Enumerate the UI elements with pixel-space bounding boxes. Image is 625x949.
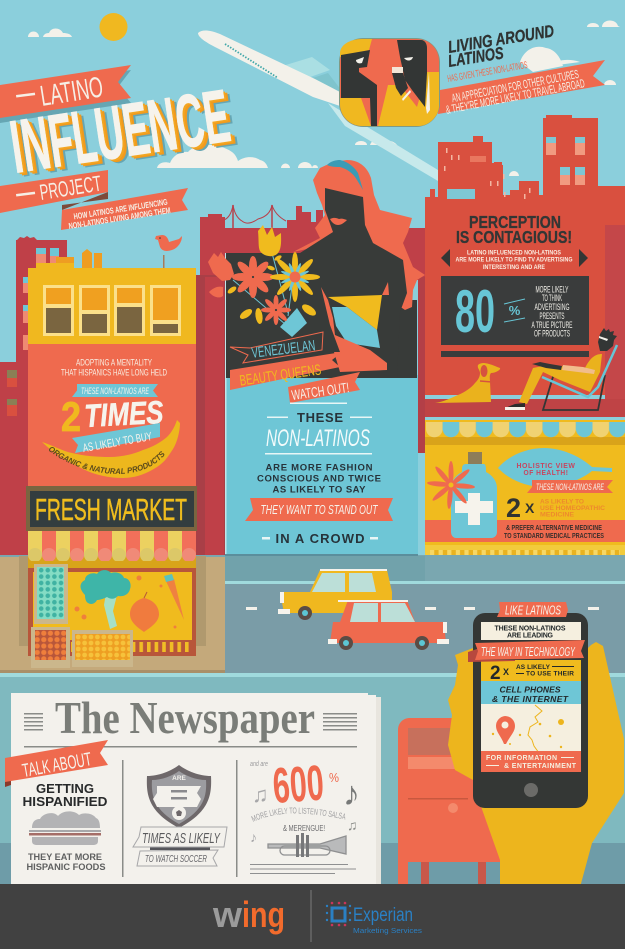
icon: carrot: [164, 574, 184, 620]
woman: [293, 160, 425, 378]
music notes: ♪: [343, 775, 360, 813]
stat: 80 percent: %: [509, 303, 521, 318]
logo: wing: [212, 894, 285, 935]
title: Influence: INFLUENCE: [12, 77, 242, 193]
store body: [28, 344, 196, 490]
screen: leading: ARE LEADING: [507, 632, 554, 640]
logo: experian: Experian: [353, 905, 413, 926]
screen: 2x cell phones: AS LIKELY: [516, 664, 551, 671]
screen: internet: & THE INTERNET: [492, 694, 569, 704]
text: more likely to find: INTERESTING AND ARE: [483, 264, 545, 271]
icon: burger: [29, 811, 101, 845]
text: more likely to find: [456, 250, 573, 271]
ribbon: times as likely: [133, 827, 227, 847]
text: more likely to listen: MORE LIKELY TO LISTEN TO SALSA: [251, 807, 346, 822]
yellow car: [278, 569, 392, 620]
TV screen: [441, 276, 589, 345]
ribbon: as likely to buy: [72, 423, 160, 455]
text on banana: organic products: ORGANIC & NATURAL PRODUCTS: [49, 447, 164, 474]
ribbon: talk about: TALK ABOUT: [21, 749, 94, 782]
text: more fashion conscious: ARE MORE FASHION: [266, 462, 373, 474]
ribbon: these non-latinos are: [72, 384, 158, 397]
flower bouquet: [208, 225, 320, 337]
text: eat more hispanic foods: [26, 852, 106, 873]
ribbon: these non-latinos are: THESE NON-LATINOS ARE: [81, 386, 150, 396]
text: adopting a mentality: ADOPTING A MENTALITY: [76, 358, 152, 368]
title: Influence: INFLUENCE: [9, 76, 239, 192]
music notes: [250, 775, 360, 845]
leaf callout: holistic view of health: OF HEALTH!: [524, 468, 568, 477]
heading: living around latinos: [447, 21, 555, 71]
rooftop tanks: [36, 249, 102, 268]
text: adopting a mentality: [61, 358, 167, 378]
icon: broccoli: [80, 570, 131, 629]
hair: [293, 160, 425, 310]
dress: [328, 295, 382, 330]
headband: [327, 160, 363, 190]
logo: experian: [326, 902, 422, 935]
leaves: [226, 254, 318, 324]
coral hand shapes: [208, 252, 234, 297]
text: alternative medicine: & PREFER ALTERNATIVE MEDICINE: [506, 525, 602, 532]
left background buildings: [0, 236, 425, 557]
stat: 2x: 2: [506, 493, 521, 523]
sign: fresh market: [26, 486, 197, 531]
screen: information: FOR INFORMATION: [486, 755, 557, 762]
floor: [425, 399, 625, 417]
crate: oranges: [31, 627, 70, 668]
text: homeopathic: AS LIKELY TO: [540, 498, 584, 506]
text: homeopathic: MEDICINE: [540, 512, 575, 518]
heading: perception: PERCEPTION: [469, 212, 561, 232]
shop: holistic view: [425, 420, 625, 570]
leaf callout: holistic view of health: HOLISTIC VIEW: [516, 461, 576, 470]
screen: leading: [481, 622, 581, 640]
logo: wing: w: [212, 894, 243, 935]
ground and road: [0, 555, 625, 885]
text: more fashion conscious: CONSCIOUS AND TWICE: [257, 474, 381, 484]
heading: getting hispanified: HISPANIFIED: [22, 794, 108, 809]
panel: venezuelan beauty queens: [208, 160, 425, 556]
icon: two women: [339, 38, 440, 127]
heading: getting hispanified: [22, 781, 108, 809]
icon: dog: [435, 363, 500, 403]
stat: 600 percent: 600: [271, 755, 326, 814]
stat: 2 times: 2: [61, 393, 81, 440]
ribbon: to watch soccer: [137, 848, 218, 866]
sky background: [0, 0, 625, 585]
text: homeopathic: USE HOMEOPATHIC: [540, 505, 605, 512]
title ribbon: Latino: [0, 65, 131, 123]
screen: map: [481, 704, 581, 757]
heading: perception: [456, 212, 572, 247]
screen: 2x cell phones: TO USE THEIR: [526, 670, 574, 678]
ribbon: times as likely: TIMES AS LIKELY: [142, 830, 221, 847]
ribbon: as likely to buy: AS LIKELY TO BUY: [82, 429, 153, 455]
text: TV stat: [532, 284, 572, 338]
icon: onion: [130, 592, 159, 632]
screen: 2x cell phones: [481, 660, 581, 684]
ribbon: venezuelan: VENEZUELAN: [251, 337, 316, 362]
stat: 2 times: [61, 393, 165, 440]
text: TV stat: PRESENTS: [540, 311, 564, 321]
ribbon: venezuelan: [230, 332, 323, 363]
panel: perception is contagious: [425, 212, 625, 417]
icon: bird: [155, 235, 182, 268]
text: eat more hispanic foods: HISPANIC FOODS: [26, 862, 106, 873]
panel: living around latinos: [339, 21, 605, 127]
airplane: [198, 30, 438, 181]
face and body: [300, 188, 407, 378]
text: alternative medicine: [504, 525, 604, 540]
logo: wing: ing: [242, 894, 285, 935]
subtitle ribbon: HOW LATINOS ARE INFLUENCING: [73, 197, 168, 221]
heading: these non-latinos: [265, 402, 372, 454]
text: more likely to find: LATINO INFLUENCED NON-LATINOS: [467, 250, 561, 256]
sign: fresh market: FRESH MARKET: [35, 492, 187, 527]
store windows: [43, 285, 181, 336]
lips: [330, 218, 347, 225]
text: eat more hispanic foods: THEY EAT MORE: [28, 852, 102, 863]
screen: internet: [481, 681, 581, 704]
newspaper title: The Newspaper: [55, 692, 315, 743]
screen: 2x cell phones: X: [503, 667, 509, 677]
music notes: ♪: [250, 829, 257, 845]
heading: these non-latinos: THESE: [297, 410, 343, 425]
tulip: [258, 225, 281, 256]
stat: 2x: X: [525, 500, 535, 516]
icon: banana: [42, 420, 180, 478]
stat: 2 times: TIMES: [83, 394, 165, 434]
sun: [100, 13, 128, 41]
icon: man in chair: [505, 328, 617, 410]
subtitle ribbon: [61, 188, 188, 231]
screen: internet: CELL PHONES: [500, 684, 561, 694]
title ribbon: Project: [0, 170, 108, 213]
TV stand: [441, 351, 589, 357]
awning: [28, 531, 196, 561]
screen: 2x cell phones: 2: [490, 663, 501, 684]
right skyline: [425, 115, 625, 399]
ribbon: these non-latinos are: [527, 480, 613, 493]
heading: living around latinos: LIVING AROUND: [447, 21, 555, 57]
ribbon: like latinos: LIKE LATINOS: [505, 602, 561, 618]
small coral flower: [261, 295, 291, 325]
mailbox: [398, 718, 500, 885]
text: has given: HAS GIVEN THESE NON-LATINOS: [447, 60, 528, 85]
title: Influence: INFLUENCE: [7, 75, 237, 191]
arrows: [441, 249, 588, 267]
text: TV stat: OF PRODUCTS: [534, 328, 570, 338]
vase: [280, 308, 307, 337]
text: homeopathic: [540, 498, 605, 518]
store lower shadow: [19, 556, 206, 646]
red car: [328, 600, 449, 650]
icon: hand holding phone: [448, 642, 624, 891]
yellow flower: [270, 252, 320, 302]
screen: information: [481, 751, 581, 772]
title: Influence: INFLUENCE: [5, 73, 235, 189]
store upper facade: [28, 268, 196, 348]
subtitle ribbon: NON-LATINOS LIVING AMONG THEM: [68, 205, 171, 231]
teal panel: [225, 375, 418, 556]
ribbon: like latinos: [497, 602, 568, 618]
icon: trumpet: [268, 833, 346, 857]
stat: 600 percent: %: [329, 770, 339, 785]
title ribbon: Latino: LATINO: [38, 71, 105, 113]
text: more likely to find: ARE MORE LIKELY TO FIND TV ADVERTISING: [456, 256, 573, 264]
masthead ornaments: [24, 713, 357, 748]
heading: perception: IS CONTAGIOUS!: [456, 227, 572, 247]
middle skyline and bridge: [200, 205, 425, 281]
panel: newspaper: [5, 692, 381, 884]
leaf callout: holistic view of health: [498, 448, 612, 487]
footer: [0, 884, 625, 949]
coral flower: [232, 256, 274, 298]
text: TV stat: A TRUE PICTURE: [532, 320, 572, 330]
ribbon: beauty queens: [230, 352, 342, 390]
ribbon: the way in technology: [468, 640, 585, 662]
text: TV stat: TO THINK: [542, 293, 562, 303]
ribbon: want to stand out: [245, 498, 393, 521]
dark panel: [226, 253, 417, 378]
produce decoration dots: [74, 576, 176, 628]
cars: [278, 569, 449, 650]
crate: teal fruit: [34, 564, 68, 624]
title: Influence: [5, 72, 242, 194]
heading: these non-latinos: NON-LATINOS: [266, 425, 370, 452]
icon: flower: [427, 461, 475, 509]
clouds: [28, 20, 620, 176]
text: TV stat: ADVERTISING: [534, 302, 570, 312]
music notes: ♫: [347, 817, 358, 833]
title ribbon: Project: PROJECT: [38, 171, 103, 205]
newspaper text lines: [250, 864, 356, 874]
music notes: ♫: [252, 782, 268, 807]
icon: soccer shield with 8: [147, 765, 211, 828]
panel: fresh market store: [19, 249, 206, 668]
ribbon: to watch soccer: TO WATCH SOCCER: [145, 854, 207, 865]
screen: information: & ENTERTAINMENT: [504, 763, 577, 770]
stat: 80 percent: 80: [455, 278, 495, 345]
text: merengue: & MERENGUE!: [283, 823, 325, 833]
icon: medicine bottle: [451, 452, 497, 538]
text: more fashion conscious: AS LIKELY TO SAY: [272, 484, 366, 496]
store window frame: [28, 556, 196, 656]
crate: yellow fruit: [72, 630, 133, 667]
panel: phone: [468, 602, 588, 808]
ribbon: watch out: WATCH OUT!: [290, 379, 350, 403]
text: in a crowd: IN A CROWD: [276, 531, 364, 546]
logo: experian: Marketing Services: [353, 926, 422, 935]
text: TV stat: MORE LIKELY: [536, 284, 568, 294]
ribbon: want to stand out: THEY WANT TO STAND OUT: [260, 502, 378, 517]
stat: 2x: [506, 493, 535, 523]
screen: leading: THESE NON-LATINOS: [494, 626, 566, 632]
heading: living around latinos: LATINOS: [447, 43, 505, 71]
text: adopting a mentality: THAT HISPANICS HAVE LONG HELD: [61, 368, 167, 378]
ribbon: talk about: [5, 740, 108, 787]
icon: soccer shield with 8: ARE: [172, 775, 187, 782]
heading: getting hispanified: GETTING: [36, 781, 94, 796]
text: and are: and are: [250, 761, 268, 768]
divider: [310, 890, 312, 942]
ribbon: beauty queens: BEAUTY QUEENS: [239, 361, 322, 390]
text: more fashion conscious: [257, 462, 381, 496]
